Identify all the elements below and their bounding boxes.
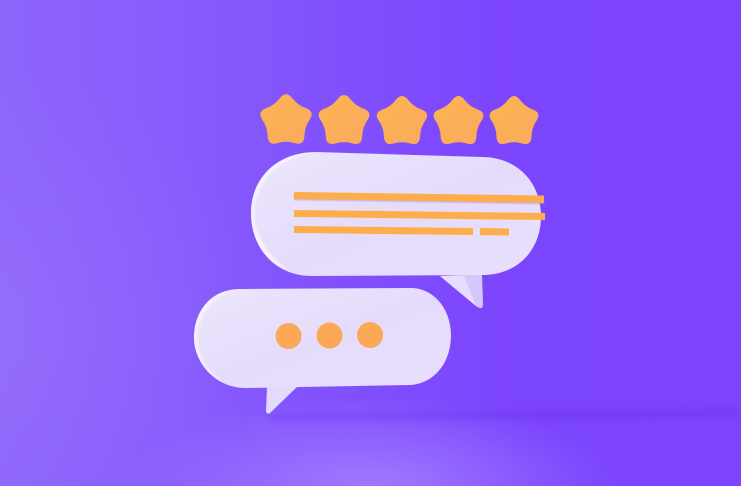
bubble body (194, 288, 451, 388)
dot 3 (357, 322, 383, 348)
dot 2 (316, 322, 342, 348)
star 3 (377, 96, 427, 144)
bubble tail (266, 386, 298, 414)
star 4 (434, 96, 483, 144)
bubble body (251, 152, 541, 276)
star 5 (490, 96, 538, 144)
typing dots (276, 322, 383, 349)
text line 2 (294, 210, 545, 220)
star 2 (319, 95, 369, 144)
text line 3 (294, 226, 473, 235)
large speech bubble (251, 152, 545, 308)
star 1 (260, 94, 312, 144)
text line 1 (294, 193, 544, 204)
bubble tail (440, 274, 483, 308)
star rating row (260, 94, 538, 144)
small speech bubble (194, 288, 451, 414)
text line 3 dash (480, 228, 509, 236)
dot 1 (276, 323, 302, 349)
